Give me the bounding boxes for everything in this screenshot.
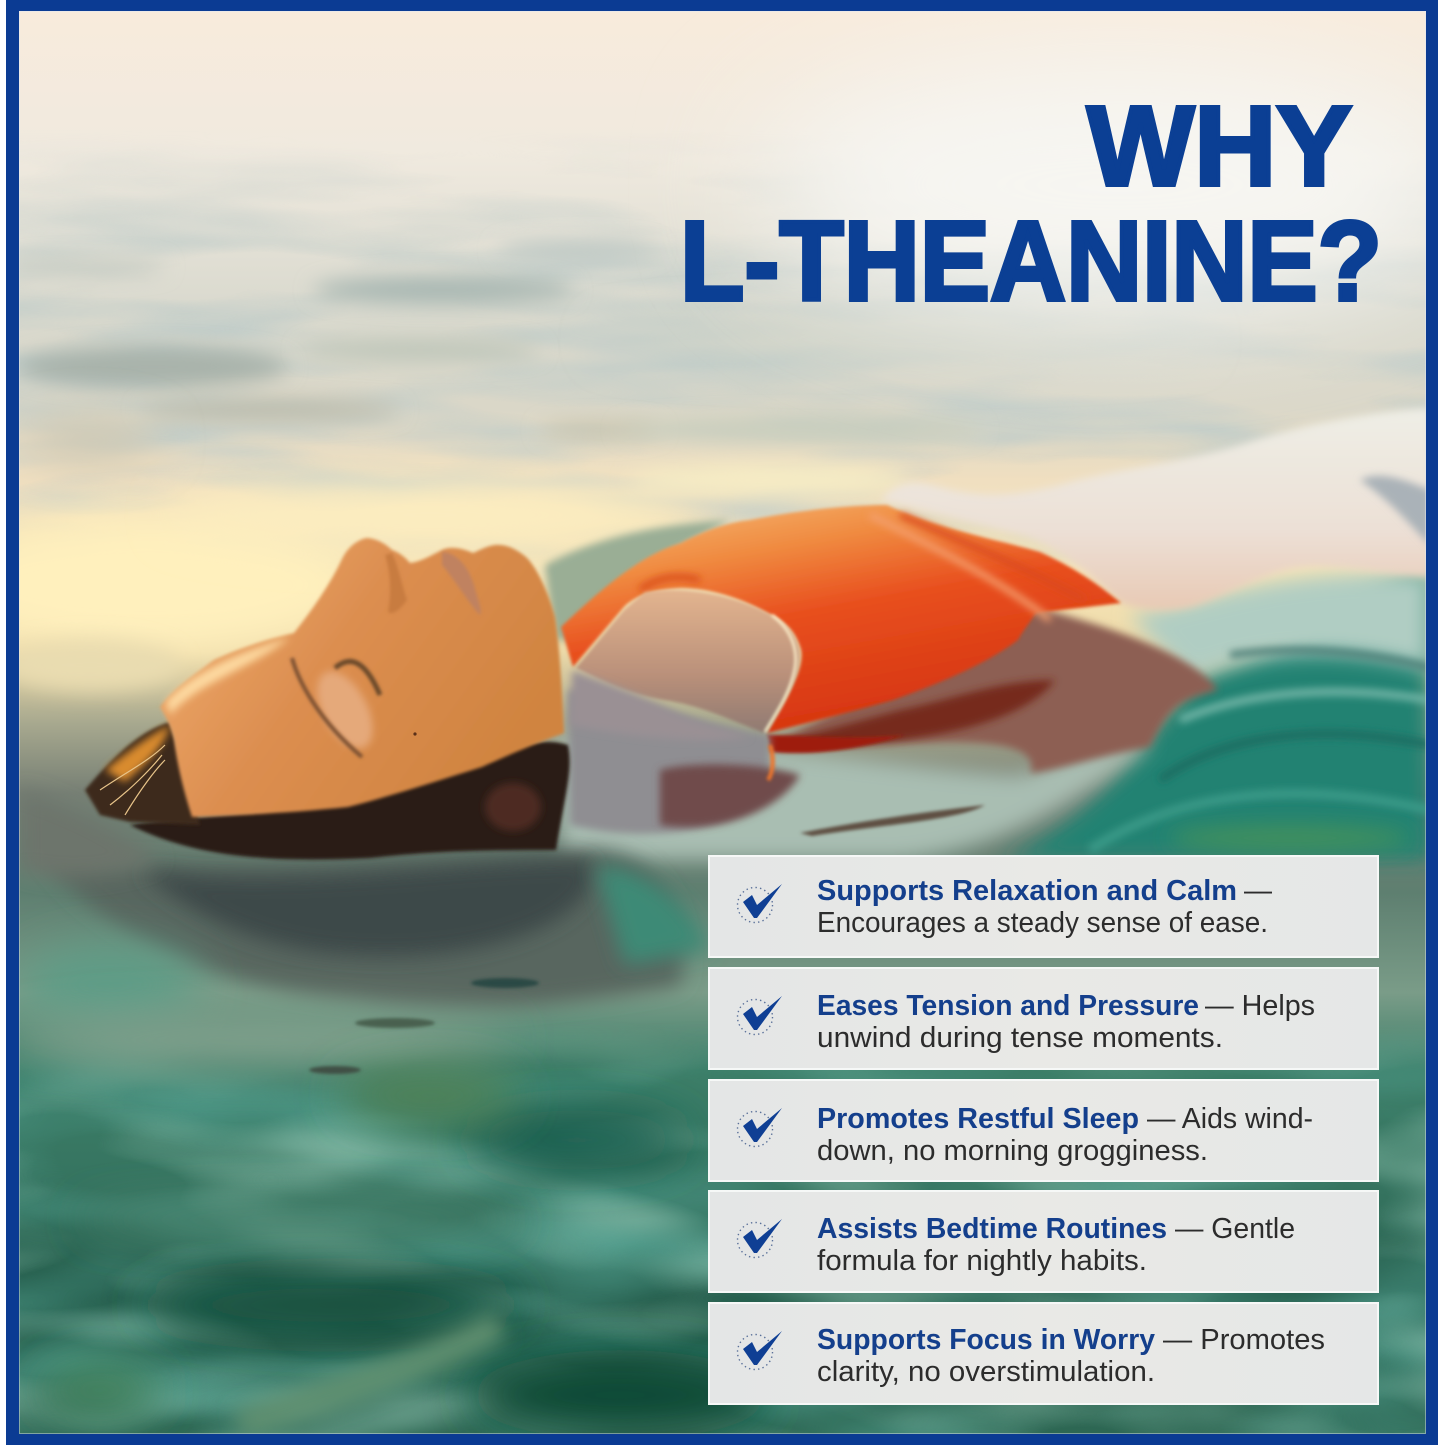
hair in water [130,742,570,859]
title: L-THEANINE? [680,198,1382,324]
dark reflection of head [20,804,708,1016]
text: relaxation benefit: Supports Relaxation and Calm [817,875,1237,907]
shaded arm edge [1360,476,1430,545]
title area highlight [760,55,1445,315]
panel: sleep benefit [709,1080,1378,1181]
icon: check mark [738,1219,782,1258]
text: focus benefit: clarity, no overstimulation. [817,1356,1155,1388]
panel: relaxation benefit [709,856,1378,957]
text: tension benefit: — Helps [1205,990,1315,1022]
icon: check mark [738,1108,782,1146]
green water behind the neck [545,520,730,640]
grey water streaks [19,158,1426,560]
title [680,83,1382,324]
text: sleep benefit [817,1103,1313,1167]
reflection of suit on water [568,607,1218,836]
text: bedtime benefit: formula for nightly habits. [817,1245,1147,1277]
lower water swirls [10,978,1426,1440]
text: focus benefit: Supports Focus in Worry [817,1324,1155,1356]
text: sleep benefit: — Aids wind- [1147,1103,1313,1135]
red swimsuit [561,505,1121,733]
icon: check mark [738,884,782,922]
text: bedtime benefit: — Gentle [1175,1213,1295,1245]
text: tension benefit [817,990,1315,1054]
panel: focus benefit [709,1303,1378,1404]
text: relaxation benefit [817,875,1272,939]
right-side water ripples [1000,570,1430,860]
icon: check mark [738,1331,782,1370]
text: focus benefit [817,1324,1325,1388]
title: WHY [1087,83,1352,209]
face [160,538,564,817]
text: bedtime benefit [817,1213,1295,1277]
golden hair strands [85,722,200,825]
chest skin [576,590,799,733]
text: sleep benefit: down, no morning grogginess. [817,1135,1208,1167]
ear [485,783,541,831]
forehead highlight [166,637,290,715]
text: sleep benefit: Promotes Restful Sleep [817,1103,1139,1135]
strap highlight [765,615,796,732]
text: relaxation benefit: Encourages a steady sense of ease. [817,907,1268,939]
text: focus benefit: — Promotes [1163,1324,1325,1356]
swimsuit folds [640,515,1085,620]
panel: bedtime benefit [709,1191,1378,1292]
text: bedtime benefit: Assists Bedtime Routines [817,1213,1167,1245]
arm and hip [881,408,1430,610]
icon: check mark [738,996,782,1034]
collarbone water [568,668,726,737]
text: tension benefit: unwind during tense moments. [817,1022,1223,1054]
text: relaxation benefit: — [1244,875,1272,907]
pale water foreground under body [560,735,1150,860]
sunlight glow on left [0,464,910,691]
panel: tension benefit [709,968,1378,1069]
facial features [292,552,481,757]
text: tension benefit: Eases Tension and Pressure [817,990,1199,1022]
